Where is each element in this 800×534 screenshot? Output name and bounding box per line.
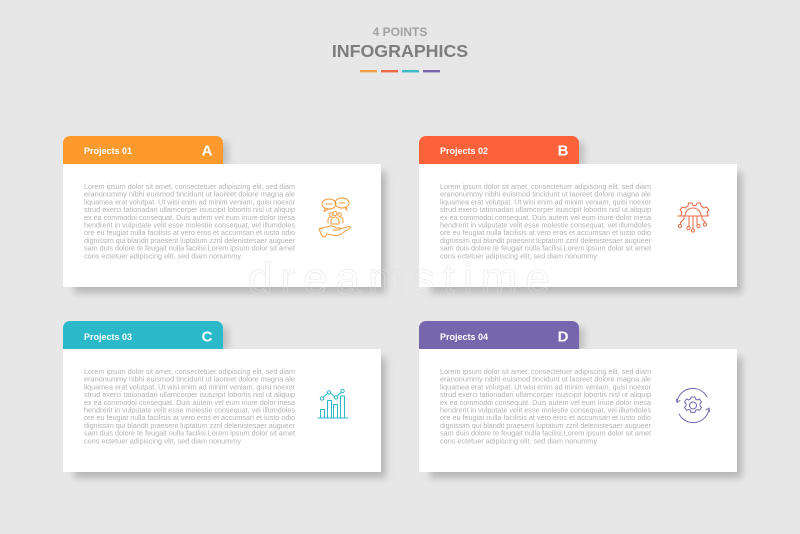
text block: eranonummy nibhi euismod tincidunt ut laoreet dolore magna ale — [440, 192, 651, 199]
title — [332, 25, 468, 61]
panel: projects 01 — [63, 136, 386, 293]
text block: sam duis dolore te feugait nulla facilisi.Lorem ipsum dolor sit amet — [440, 246, 651, 253]
text block: ex ea commodoi consequat. Duis autem vel eum iriure dolor inesa — [440, 215, 651, 222]
icon: gear with circuit nodes — [678, 203, 709, 232]
text block: ore eu feugiat nulla facilisis at vero eros et accumsan et iusto odio — [84, 230, 295, 237]
text block: liquamea erat volutpat. Ut wisi enim ad minim veniam, quisi noexor — [440, 199, 652, 206]
title accent dashes — [360, 70, 440, 72]
text block: dignissim qui blandit praesent luptatum zzril delenistesaer augueer — [440, 423, 652, 430]
icon: bar chart with trend line — [318, 389, 348, 418]
text block: cons ectetuer adipiscing elit, sed diam nonummy — [440, 438, 598, 445]
title: INFOGRAPHICS — [332, 41, 468, 61]
panel: projects 03 — [63, 321, 386, 478]
text block: hendrerit in vulputate velit esse molestie consequat, vel illumdoles — [84, 408, 296, 414]
text block: hendrerit in vulputate velit esse molestie consequat, vel illumdoles — [440, 408, 652, 414]
icon: gear with circular arrows — [676, 388, 710, 423]
tab: projects 03: C — [202, 328, 213, 346]
text block: ex ea commodoi consequat. Duis autem vel eum iriure dolor inesa — [440, 400, 651, 407]
text block: eranonummy nibhi euismod tincidunt ut laoreet dolore magna ale — [440, 377, 651, 384]
tab: projects 02: Projects 02 — [440, 146, 488, 156]
text block — [84, 184, 296, 260]
text block: dignissim qui blandit praesent luptatum zzril delenistesaer augueer — [440, 238, 652, 245]
text block: sam duis dolore te feugait nulla facilisi.Lorem ipsum dolor sit amet — [84, 246, 295, 253]
tab: projects 03 — [63, 321, 223, 349]
text block: dignissim qui blandit praesent luptatum zzril delenistesaer augueer — [84, 238, 296, 245]
text block: ore eu feugiat nulla facilisis at vero eros et accumsan et iusto odio — [440, 230, 651, 237]
tab: projects 01: A — [202, 142, 213, 160]
text block: strud exerci tationadari ullamcorper isuscipit lobortis nisl ut aliquip — [84, 207, 295, 214]
text block: ex ea commodoi consequat. Duis autem vel eum iriure dolor inesa — [84, 400, 295, 407]
tab: projects 04 — [419, 321, 579, 349]
text block: strud exerci tationadari ullamcorper isuscipit lobortis nisl ut aliquip — [440, 207, 651, 214]
text block: ore eu feugiat nulla facilisis at vero eros et accumsan et iusto odio — [84, 415, 295, 422]
text block — [84, 369, 296, 445]
text block: strud exerci tationadari ullamcorper isuscipit lobortis nisl ut aliquip — [84, 392, 295, 399]
text block: Lorem ipsum dolor sit amet, consectetuer adipiscing elit, sed diam — [440, 184, 651, 191]
text block: Lorem ipsum dolor sit amet, consectetuer adipiscing elit, sed diam — [440, 369, 651, 376]
text block: eranonummy nibhi euismod tincidunt ut laoreet dolore magna ale — [84, 192, 295, 199]
text block: cons ectetuer adipiscing elit, sed diam nonummy — [84, 438, 242, 445]
text block: eranonummy nibhi euismod tincidunt ut laoreet dolore magna ale — [84, 377, 295, 384]
tab: projects 01: Projects 01 — [84, 146, 132, 156]
text block: Lorem ipsum dolor sit amet, consectetuer adipiscing elit, sed diam — [84, 369, 295, 376]
text block: sam duis dolore te feugait nulla facilisi.Lorem ipsum dolor sit amet — [440, 431, 651, 438]
text block: Lorem ipsum dolor sit amet, consectetuer adipiscing elit, sed diam — [84, 184, 295, 191]
watermark: dreamstime — [248, 254, 550, 303]
text block: cons ectetuer adipiscing elit, sed diam nonummy — [84, 253, 242, 260]
tab: projects 04: Projects 04 — [440, 332, 488, 342]
tab: projects 02 — [419, 136, 579, 164]
tab: projects 03: Projects 03 — [84, 332, 132, 342]
panel: projects 04 — [419, 321, 742, 478]
text block: sam duis dolore te feugait nulla facilisi.Lorem ipsum dolor sit amet — [84, 431, 295, 438]
text block: ore eu feugiat nulla facilisis at vero eros et accumsan et iusto odio — [440, 415, 651, 422]
panel: projects 02 — [419, 136, 742, 293]
text block: liquamea erat volutpat. Ut wisi enim ad minim veniam, quisi noexor — [84, 384, 296, 391]
text block: hendrerit in vulputate velit esse molestie consequat, vel illumdoles — [440, 222, 652, 230]
text block: dignissim qui blandit praesent luptatum zzril delenistesaer augueer — [84, 423, 296, 430]
text block: cons ectetuer adipiscing elit, sed diam nonummy — [440, 253, 598, 260]
tab: projects 02: B — [558, 142, 569, 160]
tab: projects 01 — [63, 136, 223, 164]
tab: projects 04: D — [558, 328, 569, 346]
icon: hand with people and speech bubbles — [319, 198, 350, 237]
text block: ex ea commodoi consequat. Duis autem vel eum iriure dolor inesa — [84, 215, 295, 222]
text block: liquamea erat volutpat. Ut wisi enim ad minim veniam, quisi noexor — [440, 384, 652, 391]
text block: liquamea erat volutpat. Ut wisi enim ad minim veniam, quisi noexor — [84, 199, 296, 206]
text block: hendrerit in vulputate velit esse molestie consequat, vel illumdoles — [84, 222, 296, 230]
text block: strud exerci tationadari ullamcorper isuscipit lobortis nisl ut aliquip — [440, 392, 651, 399]
title: 4 POINTS — [373, 25, 427, 39]
text block — [440, 184, 652, 260]
text block — [440, 369, 652, 445]
